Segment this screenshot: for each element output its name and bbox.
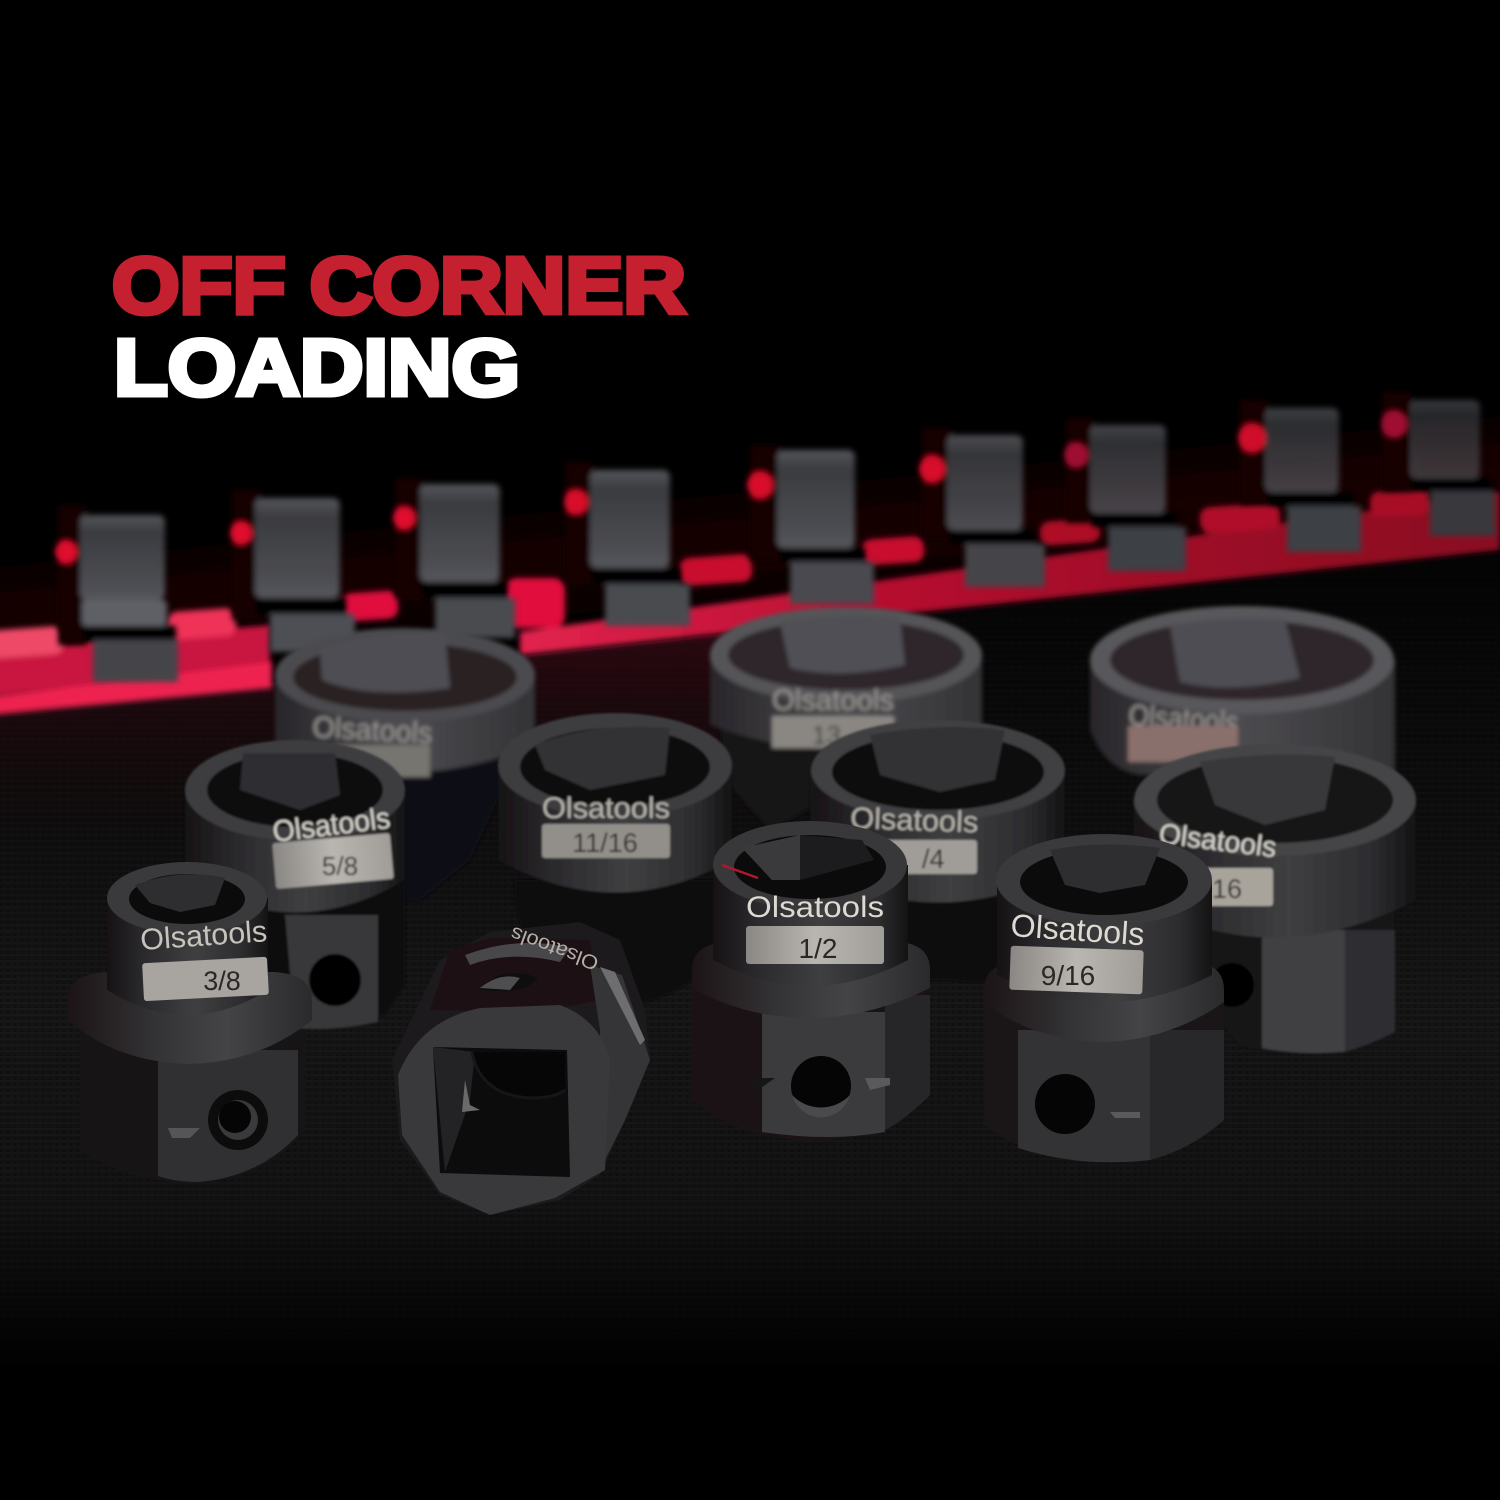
socket: 5/8 <box>185 740 405 1029</box>
dark red glow behind clips <box>0 420 1500 660</box>
upside-down logo: Olsatools <box>508 922 602 974</box>
clip 8 <box>1238 400 1361 552</box>
size label <box>1205 868 1273 906</box>
socket: 11/16 <box>498 713 732 1005</box>
clip 4 <box>564 462 690 626</box>
size label: 9/16 <box>1041 960 1095 991</box>
red socket rail <box>0 488 1500 715</box>
socket: back right <box>1090 606 1395 775</box>
clip 1 <box>55 505 178 682</box>
socket: 13/16 <box>1133 744 1416 1053</box>
table surface <box>0 552 1500 1370</box>
size label: 5/8 <box>322 851 358 881</box>
size label: /4 <box>922 844 945 874</box>
heading line: off corner: OFF CORNER <box>112 241 686 330</box>
socket: back right: Olsatools <box>1128 699 1240 740</box>
socket: upside-down showing square drive <box>392 922 650 1215</box>
socket: back centre: 13 <box>812 720 841 750</box>
logo: Olsatools <box>139 915 268 957</box>
socket: 3/4 <box>810 720 1065 982</box>
clip 3 <box>393 478 515 638</box>
size label <box>880 840 977 874</box>
logo: Olsatools <box>1010 907 1146 952</box>
size label: 3/8 <box>203 966 241 996</box>
back row sockets <box>275 606 1395 900</box>
socket: back centre: Olsatools <box>772 684 894 717</box>
clip 7 <box>1064 418 1186 571</box>
socket: back left: Olsatools <box>312 711 433 750</box>
rail clips row <box>55 392 1495 682</box>
clip 9 <box>1381 392 1495 536</box>
clip 6 <box>919 428 1045 587</box>
heading line: loading: LOADING <box>114 323 520 412</box>
size label <box>1009 946 1144 994</box>
logo: Olsatools <box>850 802 979 839</box>
size label: 16 <box>1212 874 1242 904</box>
size label <box>542 824 670 858</box>
socket: back left <box>275 628 535 900</box>
clip 2 <box>230 490 355 652</box>
size label <box>746 926 884 964</box>
title <box>112 241 686 412</box>
socket: 3/8 <box>68 862 312 1182</box>
size label <box>142 957 269 1001</box>
logo: Olsatools <box>271 802 392 849</box>
logo: Olsatools <box>1157 818 1278 864</box>
logo: Olsatools <box>542 792 670 825</box>
socket: 1/2 <box>692 821 930 1140</box>
size label <box>272 833 394 889</box>
size label: 11/16 <box>572 828 638 858</box>
size label: 1/2 <box>799 933 837 964</box>
socket: back centre <box>710 607 982 830</box>
logo: Olsatools <box>746 891 884 924</box>
socket: 9/16 <box>984 834 1224 1162</box>
clip 5 <box>747 445 874 604</box>
